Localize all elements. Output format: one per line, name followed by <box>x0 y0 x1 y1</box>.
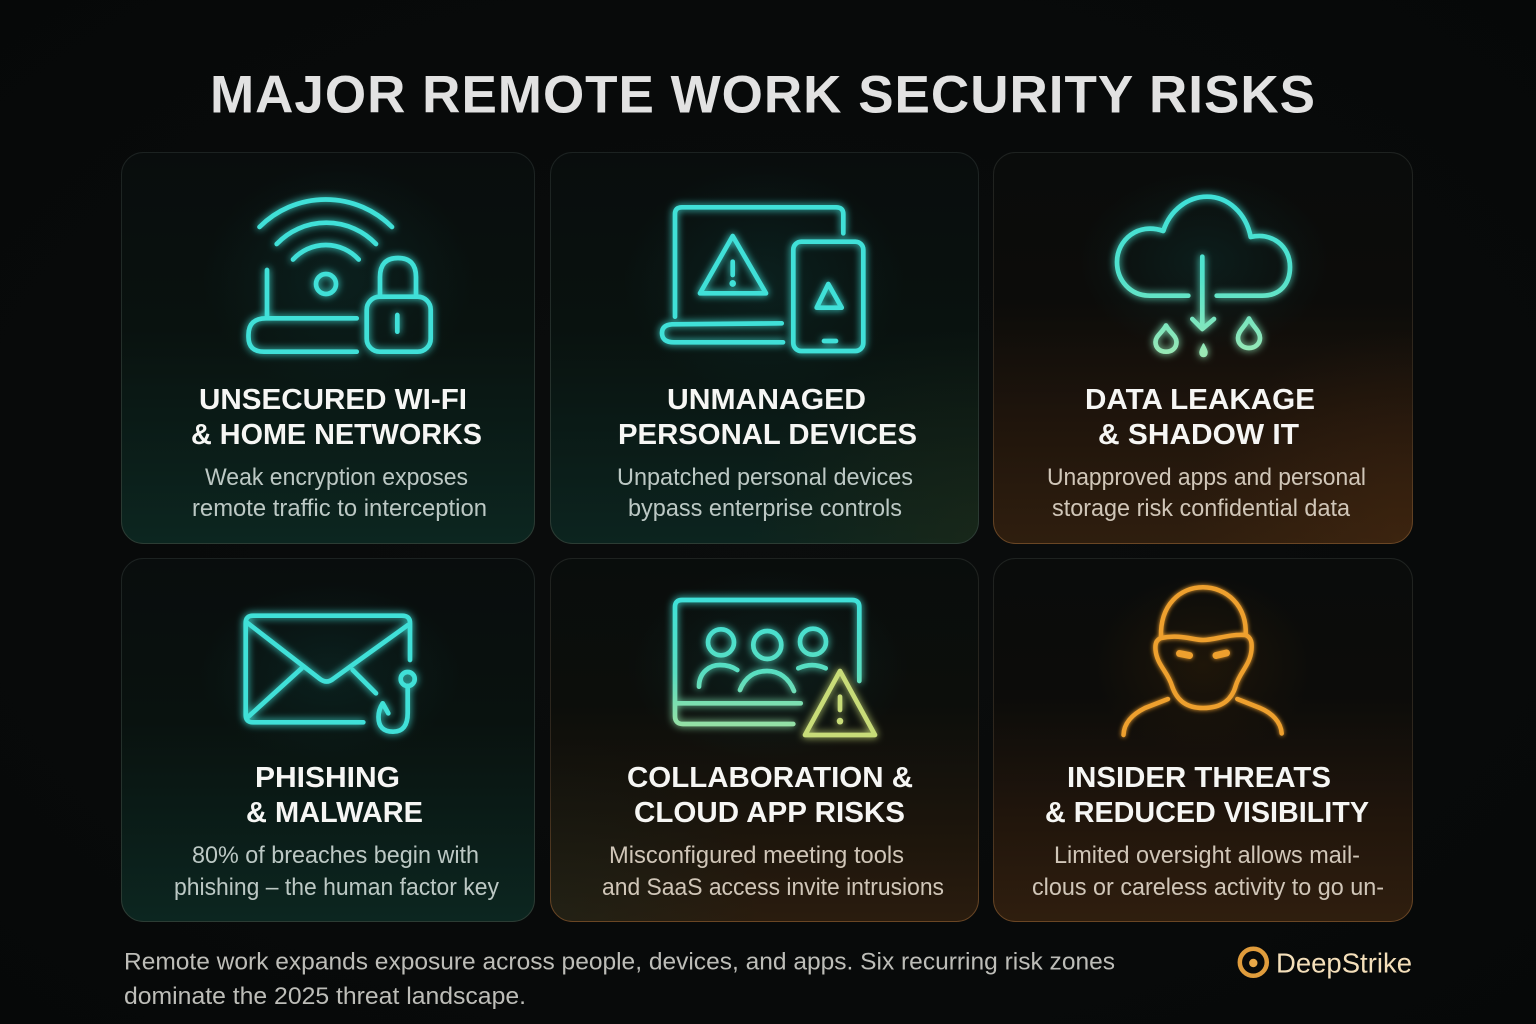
title: MAJOR REMOTE WORK SECURITY RISKS <box>210 65 1315 124</box>
footer summary text <box>124 948 1115 1010</box>
description: Misconfigured meeting tools <box>609 842 904 869</box>
description: Limited oversight allows mail- <box>1054 842 1360 869</box>
heading: PERSONAL DEVICES <box>618 419 917 451</box>
heading <box>1085 384 1315 451</box>
panel: unsecured wi-fi <box>122 152 534 544</box>
description: storage risk confidential data <box>1052 495 1351 522</box>
footer summary text: dominate the 2025 threat landscape. <box>124 983 526 1010</box>
description: bypass enterprise controls <box>628 495 902 522</box>
heading <box>618 384 917 451</box>
description: 80% of breaches begin with <box>192 842 479 869</box>
description: remote traffic to interception <box>192 495 487 522</box>
description: clous or careless activity to go un- <box>1032 874 1384 901</box>
heading: UNMANAGED <box>667 384 866 416</box>
logo mark <box>1240 949 1267 976</box>
heading: & REDUCED VISIBILITY <box>1045 797 1369 829</box>
logo: DeepStrike <box>1240 948 1412 978</box>
heading: & HOME NETWORKS <box>191 419 482 451</box>
description: phishing – the human factor key <box>174 874 499 901</box>
description <box>602 842 944 901</box>
heading: CLOUD APP RISKS <box>634 797 905 829</box>
description: Weak encryption exposes <box>205 464 468 491</box>
heading: UNSECURED WI-FI <box>199 384 467 416</box>
icon: cloud with download arrow and drops <box>1117 197 1290 356</box>
heading: & SHADOW IT <box>1098 419 1299 451</box>
footer summary text: Remote work expands exposure across people, devices, and apps. Six recurring risk zones <box>124 948 1115 976</box>
icon: masked person <box>1124 587 1282 735</box>
panel: insider threats <box>994 558 1412 922</box>
panel: data leakage and shadow it <box>994 152 1412 544</box>
description: Unapproved apps and personal <box>1047 464 1366 491</box>
heading: PHISHING <box>255 762 400 794</box>
panel: collaboration and cloud app risks <box>550 558 978 922</box>
panel: phishing and malware <box>122 558 534 922</box>
description <box>617 464 913 522</box>
panel: unmanaged personal devices <box>550 152 978 544</box>
description <box>1032 842 1384 901</box>
heading: DATA LEAKAGE <box>1085 384 1315 416</box>
heading: COLLABORATION & <box>627 762 913 794</box>
logo wordmark: DeepStrike <box>1276 948 1412 978</box>
heading <box>191 384 482 451</box>
icon: envelope with fishing hook <box>246 616 415 732</box>
heading <box>627 762 913 829</box>
description <box>174 842 499 901</box>
icon: video meeting with warning <box>675 600 875 735</box>
description: and SaaS access invite intrusions <box>602 874 944 901</box>
heading <box>246 762 423 829</box>
icon: laptop and phone with warnings <box>662 207 863 351</box>
heading <box>1045 762 1369 829</box>
icon: wi-fi router and padlock <box>248 199 431 352</box>
heading: & MALWARE <box>246 797 423 829</box>
description <box>192 464 487 522</box>
description: Unpatched personal devices <box>617 464 913 491</box>
heading: INSIDER THREATS <box>1067 762 1331 794</box>
description <box>1047 464 1366 522</box>
